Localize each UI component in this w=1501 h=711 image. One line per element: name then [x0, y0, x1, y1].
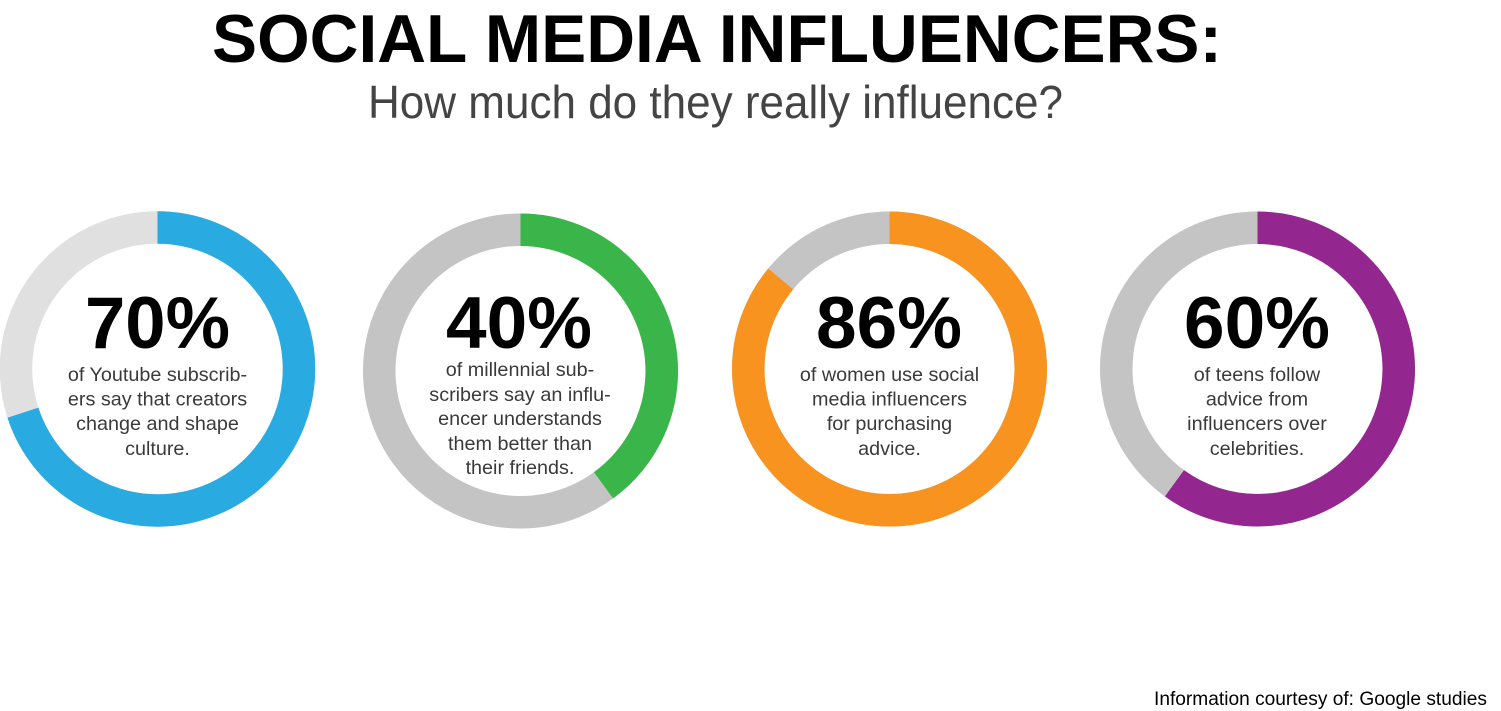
description: women: advice. — [858, 438, 921, 460]
description: millennial subscribers: them better than — [448, 433, 592, 455]
description: teens — [1187, 364, 1327, 460]
stat: 60%: 60% — [1184, 283, 1330, 364]
description: millennial subscribers — [429, 359, 611, 479]
description: teens: influencers over — [1187, 413, 1327, 435]
description: millennial subscribers: encer understands — [438, 408, 602, 430]
subtitle: How much do they really influence? — [368, 76, 1063, 128]
stat: 40%: 40% — [446, 283, 592, 364]
panel: 70% Youtube subscribers — [16, 228, 299, 510]
description: women: of women use social — [800, 364, 979, 386]
description: teens: celebrities. — [1210, 438, 1304, 460]
panel: 86% women — [748, 228, 1031, 510]
panel: 40% millennial subscribers — [379, 230, 662, 512]
stat: 70%: 70% — [85, 283, 230, 364]
description: Youtube subscribers — [68, 364, 247, 460]
description: millennial subscribers: their friends. — [466, 457, 574, 479]
description: teens: advice from — [1206, 388, 1308, 410]
description: Youtube subscribers: culture. — [125, 438, 190, 460]
description: Youtube subscribers: change and shape — [76, 413, 239, 435]
description: Youtube subscribers: of Youtube subscrib- — [68, 364, 247, 386]
donut chart: 70% blue — [16, 228, 299, 510]
donut chart: 40% green — [379, 230, 662, 512]
description: teens: of teens follow — [1194, 364, 1321, 386]
donut chart: 60% purple — [1116, 228, 1399, 510]
description: millennial subscribers: scribers say an influ- — [429, 384, 611, 406]
description: women: for purchasing — [827, 413, 952, 435]
source credit: Information courtesy of: Google studies — [1154, 688, 1487, 710]
stat: 86%: 86% — [816, 283, 962, 364]
panel: 60% teens — [1116, 228, 1399, 510]
donut chart: 86% orange — [748, 228, 1031, 510]
description: millennial subscribers: of millennial sub- — [446, 359, 594, 381]
description: Youtube subscribers: ers say that creators — [68, 388, 247, 410]
title: SOCIAL MEDIA INFLUENCERS: — [212, 1, 1222, 77]
description: women: media influencers — [812, 388, 967, 410]
description: women — [800, 364, 979, 460]
